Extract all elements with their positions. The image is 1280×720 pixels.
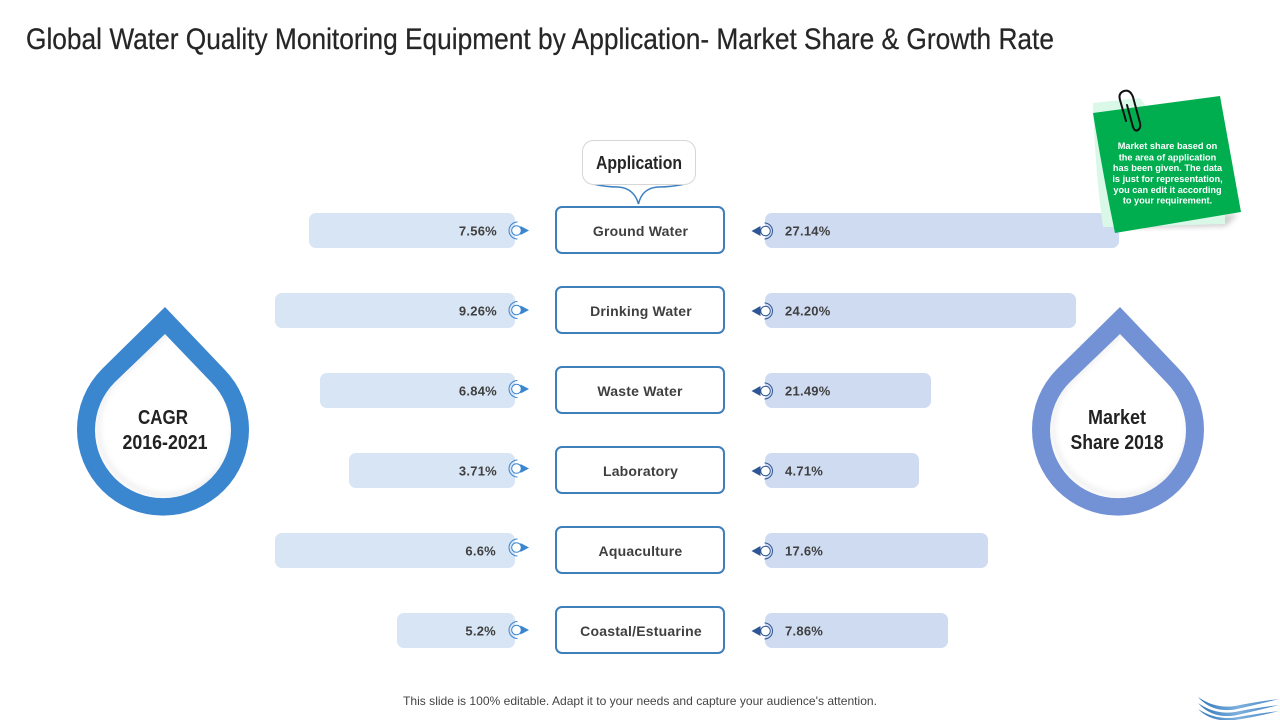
icon: paper clip: [1120, 91, 1140, 131]
row: Coastal/Estuarine: 5.2%: [465, 624, 496, 638]
row: Aquaculture: Aquaculture: [599, 543, 682, 559]
row: Ground Water: Ground Water: [593, 223, 688, 239]
row: Drinking Water: [275, 287, 1076, 333]
title: Global Water Quality Monitoring Equipment by Application- Market Share & Growth Rate: [26, 23, 1054, 56]
row: Waste Water: 6.84%: [459, 384, 497, 398]
row: Laboratory: 3.71%: [459, 464, 497, 478]
note text: you can edit it according: [1113, 185, 1222, 195]
drop: CAGR 2016-2021: CAGR: [138, 407, 188, 429]
note text: [1112, 141, 1223, 206]
row: Drinking Water: 24.20%: [785, 304, 831, 318]
row: Aquaculture: 6.6%: [465, 544, 496, 558]
row: Drinking Water: 9.26%: [459, 304, 497, 318]
row: Coastal/Estuarine: 7.86%: [785, 624, 823, 638]
row: Aquaculture: 17.6%: [785, 544, 823, 558]
row: Laboratory: [349, 447, 919, 493]
note text: Market share based on: [1118, 141, 1218, 151]
drop: CAGR 2016-2021: 2016-2021: [122, 432, 208, 454]
callout: Application: [582, 140, 696, 204]
row: Waste Water: [320, 367, 931, 413]
footer note: This slide is 100% editable. Adapt it to your needs and capture your audience's attention.: [403, 694, 877, 708]
note text: has been given. The data: [1113, 163, 1223, 173]
row: Waste Water: 21.49%: [785, 384, 831, 398]
row: Ground Water: 7.56%: [459, 224, 497, 238]
drop: Market Share 2018: Market: [1088, 407, 1146, 429]
row: Coastal/Estuarine: Coastal/Estuarine: [580, 623, 702, 639]
drop: Market Share 2018: [1032, 307, 1204, 516]
drop: Market Share 2018: Share 2018: [1070, 432, 1164, 454]
icon: waves logo: [1198, 697, 1279, 720]
sticky note: [1093, 91, 1241, 233]
row: Ground Water: [309, 207, 1119, 253]
note text: is just for representation,: [1112, 174, 1223, 184]
row: Waste Water: Waste Water: [597, 383, 683, 399]
row: Ground Water: 27.14%: [785, 224, 831, 238]
row: Laboratory: Laboratory: [603, 463, 678, 479]
callout: Application: Application: [596, 153, 682, 173]
row: Drinking Water: Drinking Water: [590, 303, 692, 319]
note text: to your requirement.: [1123, 196, 1212, 206]
row: Coastal/Estuarine: [397, 607, 948, 653]
row: Laboratory: 4.71%: [785, 464, 823, 478]
row: Aquaculture: [275, 527, 988, 573]
drop: CAGR 2016-2021: [77, 307, 249, 516]
note text: the area of application: [1119, 152, 1217, 162]
